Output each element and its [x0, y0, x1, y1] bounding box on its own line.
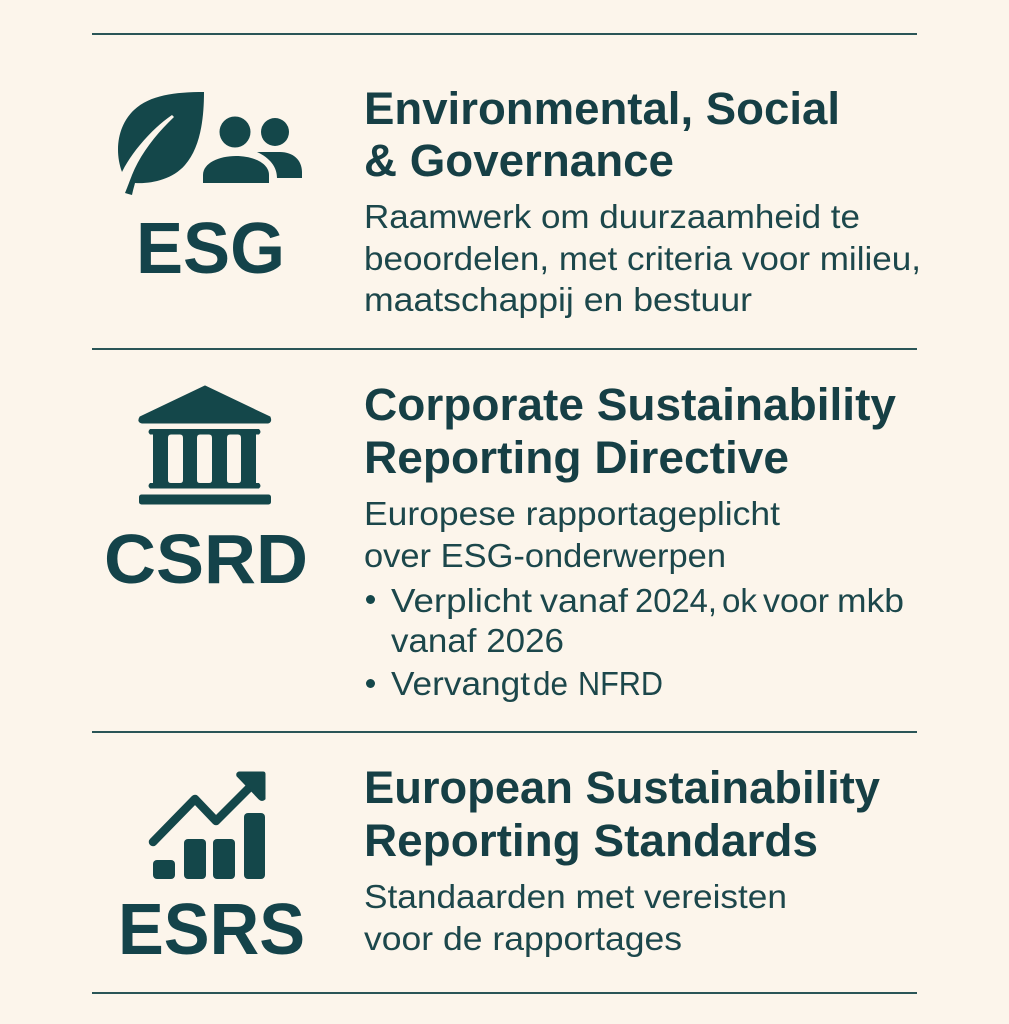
bullet list: CSRD: voor	[763, 582, 829, 619]
bullet list: CSRD	[366, 582, 904, 702]
description: ESG: Raamwerk om duurzaamheid te	[364, 198, 860, 235]
icon: institution building	[139, 386, 271, 504]
bullet list: CSRD: vanaf 2026	[391, 622, 564, 659]
heading: CSRD: Corporate Sustainability	[364, 379, 897, 430]
icon: growth chart	[153, 772, 265, 879]
heading: ESG: Environmental, Social	[364, 83, 840, 134]
acronym: CSRD: CSRD	[104, 520, 308, 598]
heading: ESG: & Governance	[364, 135, 674, 186]
bullet list: CSRD: mkb	[837, 582, 904, 619]
description: ESRS: Standaarden met vereisten	[364, 878, 787, 915]
panel: CSRD	[104, 379, 904, 702]
description: ESG: maatschappij en bestuur	[364, 281, 752, 318]
heading: ESRS: Reporting Standards	[364, 815, 818, 866]
bullet list: CSRD: vanaf	[540, 582, 629, 619]
bullet list: CSRD: ok	[722, 582, 757, 619]
bullet list: CSRD: 2024,	[635, 582, 717, 619]
bullet list: CSRD: NFRD	[578, 665, 663, 702]
icon: people	[203, 116, 302, 183]
acronym: ESG: ESG	[136, 209, 285, 289]
acronym: ESRS: ESRS	[118, 890, 305, 970]
description: CSRD: Europese rapportageplicht	[364, 495, 780, 532]
heading: ESRS: European Sustainability	[364, 762, 881, 813]
icon: leaf	[118, 92, 204, 195]
panel: ESRS	[118, 762, 881, 970]
heading: CSRD: Reporting Directive	[364, 432, 789, 483]
bullet list: CSRD: Vervangt	[391, 665, 530, 702]
bullet list: CSRD: de	[533, 665, 568, 702]
panel: ESG	[118, 83, 921, 318]
description: ESRS: voor de rapportages	[364, 920, 682, 957]
description: ESG: beoordelen, met criteria voor milieu,	[364, 240, 921, 277]
bullet list: CSRD: Verplicht	[391, 582, 532, 619]
description: CSRD: over ESG-onderwerpen	[364, 537, 726, 574]
